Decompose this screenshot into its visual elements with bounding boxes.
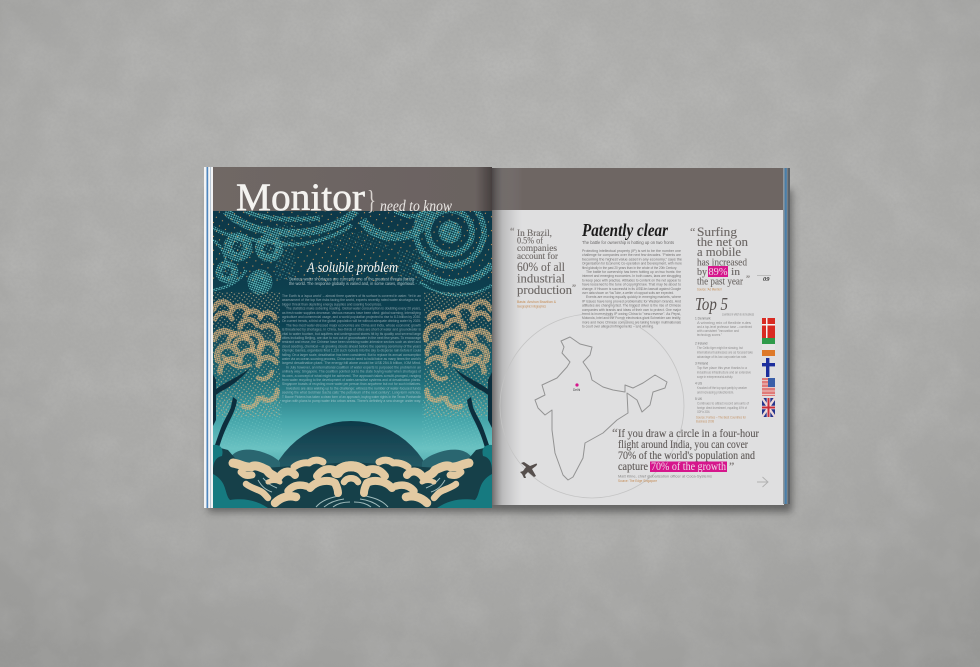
top 5 list: 5 UK [695, 397, 703, 401]
pull quote: mobile: the past year [697, 276, 744, 288]
foliage scatter [213, 292, 280, 417]
article body text: its own, a concept of what might be achieved. The approach takes a multi-pronged, ranging [282, 374, 421, 378]
flag: Denmark [762, 318, 775, 338]
top 5 caption: countries in which to do business [722, 312, 754, 316]
highlight: 89% [708, 266, 728, 277]
flags column [762, 318, 775, 417]
source: Brazil quote [517, 300, 557, 308]
pull quote: mobile: Surfing [697, 225, 738, 239]
highlight: 70% of the growth [650, 462, 727, 472]
article body: filed globally in the past 20 years than in the whole of the 20th Century. [582, 266, 677, 270]
edge stripes [783, 168, 790, 504]
pull quote: India: 70% of the world's population and [618, 450, 755, 462]
page paper [492, 168, 784, 505]
article body text: vital to water tourism, but aquifers and underground stores hit by its quality and several large [282, 332, 421, 336]
article body text: In July however, an international coalition of water experts is purposed the problem in an [286, 365, 421, 369]
pull quote: mobile: by [697, 267, 707, 278]
article body text: restraint and reuse, the Chinese have been shrinking water-intensive sectors such as steel and [282, 340, 421, 344]
top 5 list: Continues to attract record amounts of [697, 402, 749, 406]
flag: Ireland [762, 338, 775, 356]
top 5 list: advantage of its low corporate tax rate. [697, 355, 747, 359]
pull quote: Brazil: 60% of all [517, 259, 565, 274]
dome on the horizon [278, 421, 424, 467]
cream breaking waves [233, 460, 366, 503]
article body text: agriculture and commercial usage, and a world population projected to rise to 8.3 billion by 2030. [282, 315, 421, 319]
article body text [282, 294, 421, 403]
page edge stripes [204, 167, 214, 508]
article body: change. If Hiscom is successful in its US$1bn lawsuit against Google [582, 287, 681, 291]
article body: challenge for companies over the next few decades. "Patents are [582, 253, 681, 257]
top 5 list: Business 2008 [696, 420, 714, 424]
article body text: largest desalination plant. The energy bill alone would be US$ 254.5 billion, IOM Mind. [282, 361, 421, 365]
standfirst: The battle for ownership is hotting up on two fronts [582, 240, 674, 245]
top 5 list: and a top-level professor base – combined [697, 325, 752, 329]
pull quote: mobile: ” [746, 274, 750, 284]
article body text: Singapore boasts of recycling more water per person than anywhere but not for such initiatives. [282, 382, 421, 386]
pull quote: India: If you draw a circle in a four-hour [618, 428, 759, 440]
article body [582, 249, 682, 329]
pull quote: Brazil: “ [510, 227, 515, 238]
article standfirst [289, 276, 415, 286]
foreground dark sea and bushes [213, 445, 492, 508]
article body text: region with plans to pump water into urban areas. There's definitely a sea change under way. [282, 399, 421, 403]
top 5 list: GDP in 2006. [697, 410, 710, 414]
top 5 list: surge in entrepreneurial activity. [697, 375, 733, 379]
pull quote: India: flight around India, you can cover [618, 439, 748, 451]
article body text: Investors are also waking up to the challenge: witness the number of water-focused funds [286, 386, 421, 390]
article body: companies with brands and ideas of their own to protect. One major [582, 308, 682, 312]
trunk [212, 368, 250, 398]
heading: Patently clear: Patently clear [581, 220, 668, 240]
pull quote: Brazil [510, 227, 576, 297]
article body text: seeking the what Goldman Sachs calls "the petroleum of the next century". Long-term vehicles, [282, 391, 421, 395]
foliage arcs [214, 302, 279, 407]
pull quote: Brazil: In Brazil, [517, 228, 552, 238]
article body: Events are moving equally quickly in emerging markets, where [586, 295, 681, 299]
article body text: On current trends, a third of the global population will be without adequate drinking water by 2025. [282, 319, 421, 323]
pull quote: Brazil: account for [517, 251, 558, 261]
arrow [757, 477, 768, 487]
pull quote: mobile: has increased [697, 258, 747, 268]
pull quote: mobile: in [731, 267, 740, 278]
map of India [535, 337, 667, 480]
top 5 list: A winning mix of flexible rules [697, 321, 752, 325]
article body: more and more Chinese companies are taking foreign multinationals [582, 320, 681, 324]
article body text: The Earth is a 'aqua world' – almost three quarters of its surface is covered in water. Yet in an [282, 294, 421, 298]
pull quote: Brazil: companies [517, 243, 558, 253]
article body: IP issues have long proved problematic for Western brands. And [582, 299, 681, 303]
article body: Protecting intellectual property (IP) is set to be the number one [582, 249, 681, 253]
article body text: cloud seeding, chemical – at growing clouds ahead before the opening ceremony of the years [282, 344, 421, 348]
flag: USA [762, 378, 775, 396]
header band [492, 168, 783, 210]
pull quote: Brazil: production [517, 282, 572, 297]
article body: internet and emerging economies. In both cases, laws are struggling [582, 274, 681, 278]
pull quote: India [612, 425, 759, 473]
article standfirst: Serious water shortages are currently one of the greatest threats facing [289, 276, 415, 282]
pull quote: Brazil: industrial [517, 270, 565, 286]
tree left [212, 292, 282, 452]
article body text: The two most water-stressed major economies are China and India, whose economic growth [286, 323, 421, 327]
pattern: dotted swirls at the top [213, 211, 492, 297]
top 5 list: and increasing protectionism. [697, 390, 734, 394]
waves right (mirrored) [336, 460, 469, 503]
article body text: as fresh water supplies decrease. Various reasons have been cited: global warming, intensifying [282, 311, 421, 315]
white wave lines [258, 478, 445, 507]
pull quote: India: capture [618, 461, 648, 473]
top 5 list [695, 316, 753, 424]
heading: Top 5: Top 5 [695, 294, 728, 314]
right page: Patently clear [492, 168, 790, 505]
article body: The battle for ownership has been hotting up on two fronts: the [586, 270, 681, 274]
article body: trend is increasingly IP owing China to "new-reverse". As Pepsi, [582, 312, 681, 316]
top 5 list: Source: Forbes – The Best Countries for [696, 416, 747, 420]
top 5 list: foreign direct investment, equalling 40% of [697, 406, 747, 410]
flight radius circle [500, 314, 684, 498]
top 5 list: with consistent "innovation and [697, 329, 739, 333]
source: Brazil quote: Geographic Infographics [517, 304, 546, 308]
article body text: is threatened by shortages. In China, two-thirds of cities are short of water and groundwater is [282, 328, 421, 332]
map marker: Delhi: Delhi [573, 388, 581, 392]
magazine spread [204, 167, 790, 508]
pull quote: Brazil: 0.5% of [517, 236, 543, 246]
source: mobile quote: Source: 'Ad Mention' [697, 288, 722, 292]
header band [213, 167, 492, 212]
brace: } [367, 185, 376, 215]
article body text: T Boone Pickens has taken a clean form of an approach, buying water rights in the Texas Panhandle [282, 395, 421, 399]
article body text: The statistics make sobering reading. Global water consumption is doubling every 20 years, [286, 307, 421, 311]
attribution: Matt Kilne, chief globalization officer at Coca-Systems [618, 474, 712, 478]
article body text: bigger threat than depleting energy supplies and soaring food prices. [282, 302, 382, 306]
pull quote: mobile: a mobile [697, 245, 741, 259]
article body: over data shown on YouTube, a welter of copycat suits are expected. [582, 291, 674, 295]
map marker: Delhi [573, 383, 581, 392]
subtitle: need to know: need to know [380, 198, 453, 215]
gutter shade [492, 168, 522, 505]
top 5 list: technology scores." [697, 333, 722, 337]
article body text: Olympic Games, organisers fired 1,110 such rockets into the sky to disperse rain before it could [282, 349, 421, 353]
pull quote: mobile: 89% [708, 267, 728, 278]
article body: to court over alleged infringements – and winning. [582, 325, 654, 329]
pull quote: mobile [690, 225, 750, 288]
top 5 list: The Celtic tiger might be slowing, but [697, 346, 743, 350]
pull quote: India: “ [612, 425, 618, 440]
icon: airplane [520, 462, 537, 478]
pull quote: Brazil: ” [572, 283, 576, 293]
page number: 09 [763, 276, 770, 283]
article body text: water via an ocean-sourcing process, China would need to build twice as many times the world's [282, 357, 421, 361]
top 5 list: 3 Finland [695, 362, 708, 366]
left page: water feature [204, 167, 492, 508]
top 5 list: 1 Denmark [695, 316, 711, 320]
pull quote: India: ” [729, 459, 734, 473]
flag: UK [762, 398, 775, 417]
tree right (mirrored) [422, 292, 492, 452]
article body: Motorola, Intel and the French electronics giant Schneider can testify, [582, 316, 681, 320]
masthead [236, 176, 453, 219]
article body: have loosened to the tune of copyright law. That may be about to [582, 283, 681, 287]
top 5 list: international businesses are as focused take [697, 350, 753, 354]
article body text: unlikely way: Singapore. The coalition pointed out to the state buying water when shortages of [282, 370, 421, 374]
title: Monitor: Monitor [236, 176, 365, 219]
magazine shadow [208, 190, 792, 512]
article body text: falling. On a larger scale, desalination has been considered. But to replace its annual consumption [282, 353, 421, 357]
top 5 list: 2 Ireland [695, 342, 708, 346]
article body text: cities including Beijing, are due to run out of groundwater in the next few years. To encourage [282, 336, 421, 340]
article body: Organisation for Economic Co-operation and Development, with more [582, 262, 682, 266]
article body: becoming the highest value asset in any economy," says the [582, 257, 682, 261]
page number [757, 275, 771, 283]
article body: to keep pace with practice. Attitudes to content on the net appear to [582, 278, 681, 282]
distant hills [232, 450, 471, 468]
pull quote: mobile: “ [690, 225, 695, 239]
article body text: assessment of the top five risks facing the world, experts recently rated water shortages as a [282, 298, 421, 302]
top 5 list: Top five place this year thanks to a [697, 366, 747, 370]
source: Brazil quote: Basis: Anshun Brazilian & [517, 300, 557, 304]
article heading: A soluble problem [306, 260, 398, 276]
article body text: from water recycling to the development of water-sensitive systems and of desalination plants. [282, 378, 421, 382]
pull quote: India: 70% of the growth [651, 461, 726, 473]
pull quote: mobile: the net on [697, 235, 749, 249]
top 5 list: Knocked off the top spot partly by weaker [697, 386, 748, 390]
article standfirst: the world. The response globally is varied and, in some cases, ingenious. [289, 281, 415, 286]
illustration: night sea under trees [213, 211, 492, 508]
flag: Finland [762, 358, 775, 377]
top 5 list: industrious infrastructure and an extensive [697, 370, 751, 374]
source: India quote: Source: The Edge Singapore [618, 479, 657, 483]
article body: attitudes are changing fast. The biggest driver is the rise of Chinese [582, 304, 681, 308]
top 5 list: 4 US [695, 382, 702, 386]
